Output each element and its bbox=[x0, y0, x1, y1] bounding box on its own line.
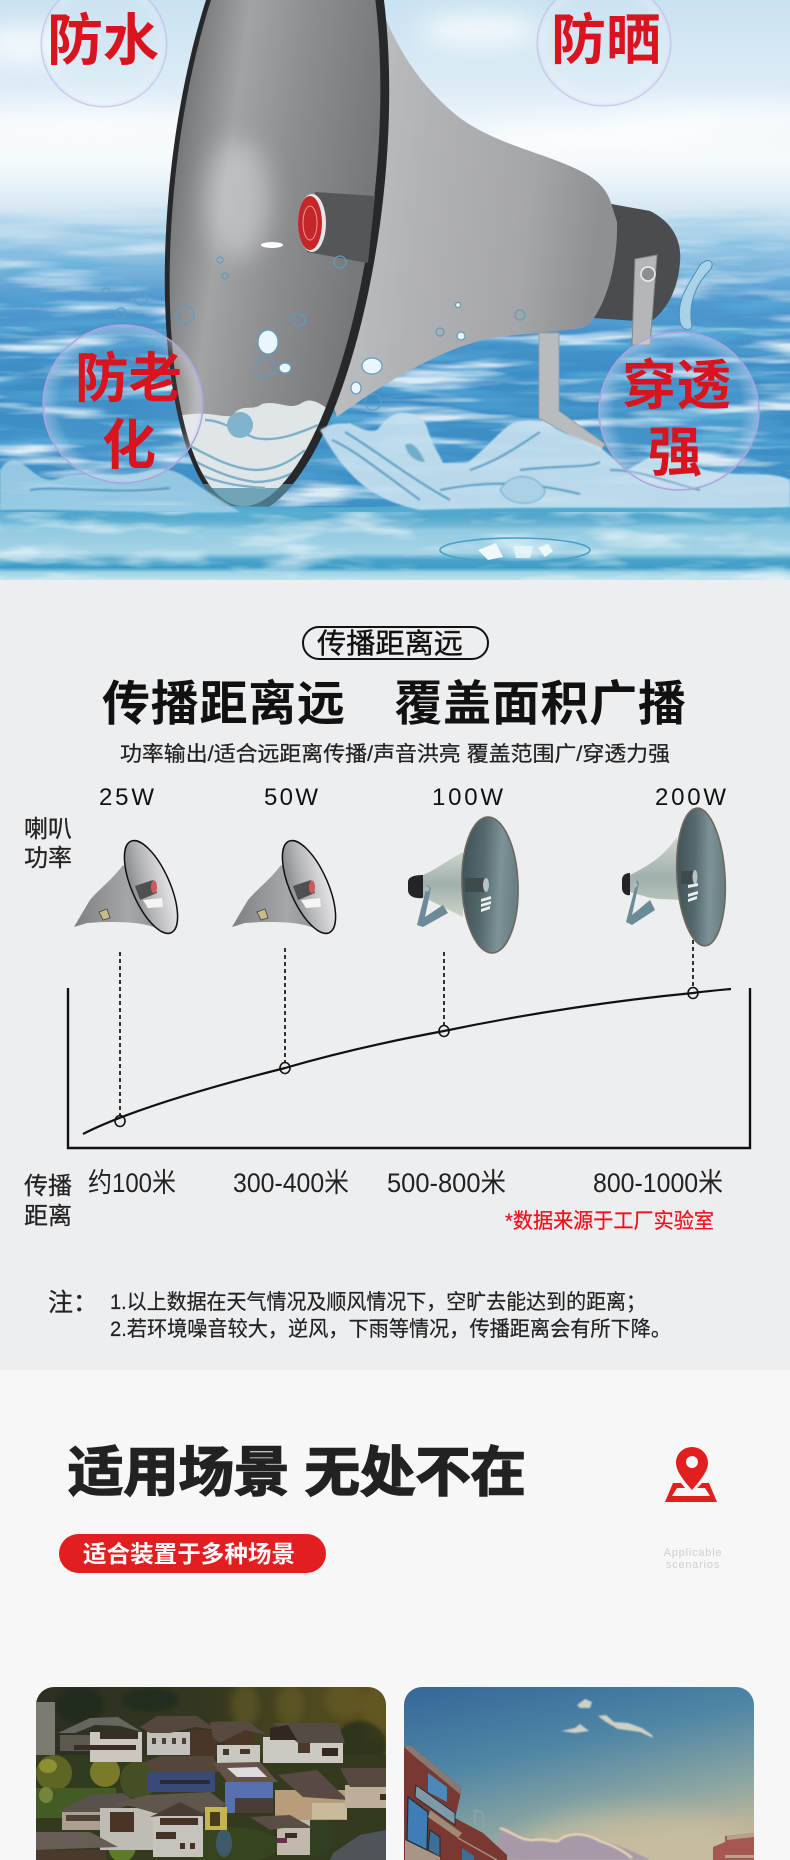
speaker front rim bbox=[135, 0, 419, 526]
bubble: 穿透强 bbox=[599, 332, 759, 490]
notes text: 2.若环境噪音较大，逆风，下雨等情况，传播距离会有所下降。 bbox=[110, 1318, 671, 1341]
clouds bbox=[561, 1699, 653, 1738]
tag: pill heading: 传播距离远 bbox=[317, 628, 463, 659]
label: 100W: 100W bbox=[432, 784, 503, 811]
speaker: 25W bbox=[74, 834, 188, 940]
houses middle row bbox=[143, 1756, 386, 1820]
value: 800-1000 m: 800-1000米 bbox=[593, 1168, 723, 1198]
bubble: 防老化: 防老 bbox=[75, 349, 182, 409]
speaker submerged rim bbox=[182, 400, 326, 507]
chart guide lines bbox=[120, 940, 693, 1116]
panel: application scenarios bbox=[36, 1444, 754, 1860]
note label: 注： bbox=[48, 1289, 98, 1317]
bubble: 穿透强: 穿透 bbox=[622, 356, 731, 416]
chart: distance curve bbox=[68, 940, 750, 1148]
caption: applicable scenarios bbox=[664, 1547, 722, 1571]
speaker: 50W bbox=[232, 834, 346, 940]
houses back row bbox=[36, 1702, 345, 1765]
label: 25W: 25W bbox=[99, 784, 154, 811]
value: 500-800 m: 500-800米 bbox=[387, 1168, 506, 1198]
houses front row bbox=[36, 1792, 386, 1860]
value: about 100 m: 约100米 bbox=[88, 1168, 176, 1198]
splash streak right bbox=[679, 261, 712, 329]
tag: red pill: 适合装置于多种场景 bbox=[83, 1541, 295, 1567]
icon: location pin bbox=[665, 1447, 717, 1502]
speaker cone body bbox=[300, 0, 617, 417]
chart line bbox=[83, 989, 731, 1134]
label: speaker power: 喇叭 bbox=[24, 816, 72, 843]
label: 50W: 50W bbox=[264, 784, 318, 811]
bubble: 防水 bbox=[41, 0, 167, 107]
speaker: 100W bbox=[408, 816, 520, 954]
chart axes bbox=[68, 988, 750, 1148]
bubble: 防晒: 防晒 bbox=[551, 9, 661, 71]
label: distance: 距离 bbox=[24, 1203, 72, 1230]
photo: city buildings bbox=[404, 1687, 770, 1860]
speaker rear bracket bbox=[539, 333, 605, 452]
speaker driver bbox=[594, 203, 680, 322]
speaker red badge bbox=[298, 194, 326, 252]
foam crest bbox=[0, 413, 790, 512]
background: sky bbox=[0, 0, 790, 170]
label: speaker power: 功率 bbox=[24, 845, 72, 872]
panel: waterproof hero bbox=[0, 0, 790, 580]
speaker side bracket bbox=[632, 255, 657, 345]
water droplets bbox=[102, 256, 525, 410]
chart points bbox=[115, 988, 698, 1126]
heading: 适用场景 无处不在 bbox=[68, 1443, 526, 1503]
heading: 传播距离远 覆盖面积广播 bbox=[102, 678, 686, 731]
note: data source: *数据来源于工厂实验室 bbox=[505, 1210, 714, 1233]
panel: propagation distance bbox=[0, 580, 790, 1370]
bubble: 防老化 bbox=[43, 325, 203, 483]
illustration: horn speaker bbox=[135, 0, 680, 526]
bubble: 防老化: 化 bbox=[102, 416, 156, 476]
water splash bbox=[0, 256, 790, 580]
bottom water band bbox=[0, 503, 790, 580]
caption: applicable scenarios: scenarios bbox=[666, 1559, 720, 1571]
notes text bbox=[110, 1291, 671, 1341]
speaker: 200W bbox=[622, 807, 729, 947]
value: 300-400 m: 300-400米 bbox=[233, 1168, 349, 1198]
bubble: 穿透强: 强 bbox=[648, 423, 702, 483]
label: distance bbox=[24, 1173, 72, 1230]
caption: applicable scenarios: Applicable bbox=[664, 1547, 722, 1559]
brick building bbox=[404, 1745, 507, 1860]
notes text: 1.以上数据在天气情况及顺风情况下，空旷去能达到的距离； bbox=[110, 1291, 646, 1314]
cloud bank bbox=[497, 1827, 650, 1860]
label: speaker power bbox=[24, 816, 72, 872]
speaker phase plug bbox=[307, 192, 375, 263]
background: sea bbox=[0, 173, 790, 508]
label: 200W: 200W bbox=[655, 784, 726, 811]
bubble: 防晒 bbox=[537, 0, 671, 106]
label: distance: 传播 bbox=[24, 1173, 72, 1200]
subtitle: 功率输出/适合远距离传播/声音洪亮 覆盖范围广/穿透力强 bbox=[120, 743, 670, 766]
speaker inner cone bbox=[141, 0, 409, 517]
tree cluster bbox=[36, 1755, 277, 1860]
photo: village bbox=[36, 1682, 387, 1860]
bubble: 防水: 防水 bbox=[47, 9, 159, 72]
far building bbox=[713, 1833, 754, 1860]
tag: red pill bbox=[59, 1534, 326, 1573]
